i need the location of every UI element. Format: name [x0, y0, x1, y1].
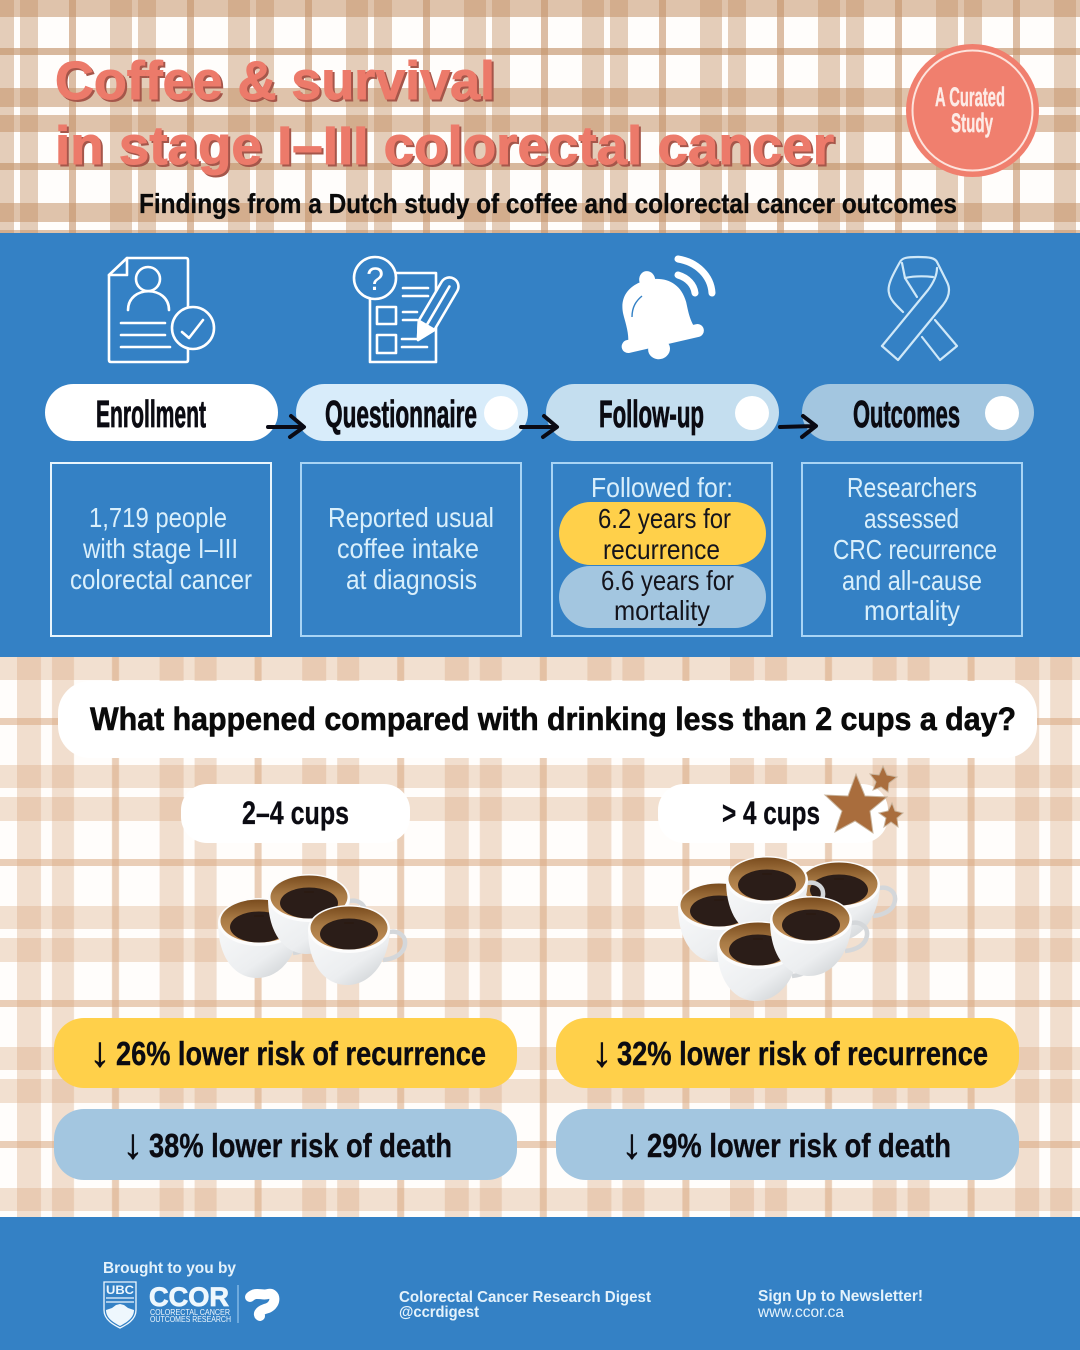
result: 26% lower risk of recurrence [54, 1018, 517, 1088]
result: 26% lower risk of recurrence: ↓ [90, 1028, 110, 1075]
box: outcomes detail: mortality [864, 595, 960, 626]
badge: a curated study: Study [951, 108, 993, 138]
box: questionnaire detail: at diagnosis [346, 564, 477, 595]
box: follow-up detail [552, 463, 772, 636]
illustration: three cups of coffee [218, 874, 405, 985]
subtitle: Findings from a Dutch study of coffee and colorectal cancer outcomes [139, 188, 957, 219]
background: plaid lower section [0, 656, 1080, 1218]
result: 26% lower risk of recurrence: 26% lower risk of recurrence [116, 1035, 486, 1072]
label: 2–4 cups [181, 784, 410, 843]
question banner [58, 681, 1037, 758]
pill: recurrence follow-up: 6.2 years for [598, 503, 731, 534]
box: enrollment detail: with stage I–III [82, 533, 238, 564]
pill: recurrence follow-up [559, 502, 766, 565]
pill: enrollment: Enrollment [96, 394, 206, 436]
result: 29% lower risk of death: ↓ [622, 1120, 642, 1167]
pill: outcomes: Outcomes [853, 394, 960, 436]
result: 38% lower risk of death: ↓ [122, 1120, 144, 1167]
box: questionnaire detail [301, 463, 521, 636]
badge: a curated study [906, 44, 1039, 177]
result: 32% lower risk of recurrence: ↓ [592, 1028, 612, 1075]
question banner: What happened compared with drinking less than 2 cups a day? [90, 701, 1016, 737]
background: plaid header [0, 0, 1080, 234]
box: outcomes detail: and all-cause [842, 565, 982, 596]
result: 32% lower risk of recurrence: 32% lower risk of recurrence [617, 1035, 988, 1072]
pill: mortality follow-up: 6.6 years for [601, 565, 734, 596]
box: outcomes detail: CRC recurrence [833, 534, 997, 565]
result: 29% lower risk of death: 29% lower risk of death [647, 1127, 951, 1164]
box: enrollment detail [51, 463, 271, 636]
text: digest credit [399, 1289, 651, 1321]
text: digest credit: Colorectal Cancer Research Digest [399, 1289, 651, 1306]
box: enrollment detail: 1,719 people [89, 502, 227, 533]
icon: bell [606, 259, 712, 367]
label: more than 4 cups: > 4 cups [722, 795, 820, 831]
icon: enrollment document [109, 258, 214, 362]
arrow: follow-up to outcomes [780, 416, 816, 437]
icon: ribbon [882, 257, 957, 360]
box: questionnaire detail: coffee intake [337, 533, 479, 564]
panel: footer [0, 1217, 1080, 1350]
pill: mortality follow-up [559, 565, 766, 628]
result: 38% lower risk of death: 38% lower risk of death [149, 1127, 452, 1164]
logo: UBC shield: UBC [106, 1283, 134, 1297]
icon: questionnaire [354, 257, 458, 362]
pill: enrollment [45, 384, 278, 441]
icon: questionnaire: ? [366, 261, 384, 297]
logo: CCOR wordmark: CCOR [149, 1282, 229, 1312]
panel: study timeline [0, 233, 1080, 657]
box: outcomes detail [802, 463, 1022, 636]
pill: outcomes [802, 384, 1034, 441]
logo: CCOR wordmark [149, 1282, 231, 1324]
box: questionnaire detail: Reported usual [328, 502, 494, 533]
illustration: five cups of coffee [678, 856, 895, 1001]
arrow: enrollment to questionnaire [268, 416, 304, 437]
pill: follow-up: Follow-up [599, 394, 704, 436]
result: 29% lower risk of death [556, 1109, 1019, 1180]
text: newsletter sign-up [757, 1288, 923, 1321]
box: outcomes detail: assessed [864, 503, 959, 534]
logo: CCOR wordmark: OUTCOMES RESEARCH [150, 1315, 231, 1324]
text: digest credit: @ccrdigest [399, 1304, 479, 1321]
logo: colon icon [238, 1285, 274, 1323]
badge: a curated study: A Curated [935, 82, 1005, 112]
box: enrollment detail: colorectal cancer [70, 564, 252, 595]
result: 38% lower risk of death [54, 1109, 517, 1180]
icon: stars [825, 766, 903, 833]
pill: recurrence follow-up: recurrence [603, 534, 720, 565]
pill: questionnaire: Questionnaire [325, 394, 477, 436]
result: 32% lower risk of recurrence [556, 1018, 1019, 1088]
logo: CCOR wordmark: COLORECTAL CANCER [150, 1308, 230, 1317]
title: in stage I–III colorectal cancer [55, 116, 834, 176]
text: newsletter sign-up: Sign Up to Newsletter! [758, 1288, 923, 1305]
logo: UBC shield [104, 1282, 136, 1328]
box: outcomes detail: Researchers [847, 472, 977, 503]
pill: mortality follow-up: mortality [614, 595, 710, 626]
text: brought to you by: Brought to you by [103, 1260, 236, 1277]
text: newsletter sign-up: www.ccor.ca [757, 1304, 844, 1321]
label: 2–4 cups: 2–4 cups [242, 795, 349, 831]
arrow: questionnaire to follow-up [521, 416, 557, 437]
label: more than 4 cups [658, 784, 888, 843]
pill: follow-up [546, 384, 779, 441]
pill: questionnaire [296, 384, 528, 441]
title [55, 51, 834, 176]
title: Coffee & survival [55, 51, 495, 111]
box: follow-up detail: Followed for: [591, 472, 733, 503]
